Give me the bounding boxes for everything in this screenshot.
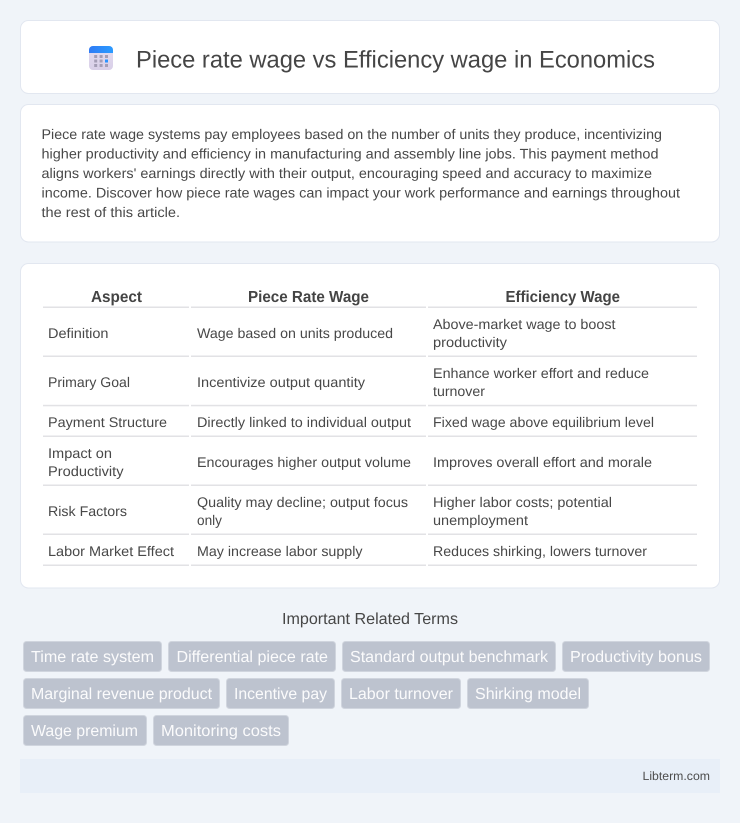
- tag: Wage premium: [31, 723, 138, 740]
- row: labor market effect: [48, 543, 647, 559]
- heading: important related terms: Important Related Terms: [282, 611, 458, 628]
- row: payment structure: Fixed wage above equilibrium level: [433, 414, 654, 430]
- tag: [24, 642, 162, 672]
- tag: Time rate system: [31, 649, 154, 666]
- tag: [468, 678, 588, 708]
- tag: [226, 678, 334, 708]
- tag: Productivity bonus: [570, 649, 702, 666]
- row: payment structure: [48, 414, 654, 430]
- related terms tags: [24, 642, 710, 746]
- intro text: aligns workers' earnings directly with their output, encouraging speed and accuracy to maximize: [42, 165, 652, 181]
- title: Piece rate wage vs Efficiency wage in Economics: [136, 46, 655, 74]
- intro text: the rest of this article.: [42, 204, 180, 220]
- row: definition: [48, 316, 616, 350]
- footer: Libterm.com: [642, 769, 710, 783]
- intro text: higher productivity and efficiency in manufacturing and assembly line jobs. This payment method: [42, 146, 659, 162]
- tag: Differential piece rate: [176, 649, 328, 666]
- table header row: Efficiency Wage: [506, 289, 620, 306]
- tag: [342, 642, 556, 672]
- row: primary goal: Incentivize output quantity: [197, 374, 365, 390]
- footer: [20, 759, 720, 793]
- panel: intro paragraph: [20, 104, 720, 242]
- tag: Labor turnover: [349, 686, 454, 703]
- row: labor market effect: Reduces shirking, lowers turnover: [433, 543, 647, 559]
- tag: Shirking model: [475, 686, 581, 703]
- tag: [168, 642, 336, 672]
- table header row: [91, 289, 620, 306]
- tag: Incentive pay: [234, 686, 327, 703]
- row: risk factors: unemployment: [433, 512, 528, 528]
- row: payment structure: Directly linked to individual output: [197, 414, 411, 430]
- icon: calendar: [89, 46, 113, 70]
- row: risk factors: Higher labor costs; potential: [433, 494, 612, 510]
- row: impact on productivity: [48, 445, 652, 479]
- tag: [562, 642, 710, 672]
- row: primary goal: Primary Goal: [48, 374, 130, 390]
- tag: Standard output benchmark: [350, 649, 549, 666]
- tag: [24, 716, 146, 746]
- row: payment structure: Payment Structure: [48, 414, 167, 430]
- table header row: Aspect: [91, 289, 143, 306]
- row: definition: Wage based on units produced: [197, 325, 393, 341]
- intro text: [42, 126, 680, 220]
- row: primary goal: [48, 365, 649, 399]
- row: impact on productivity: Impact on: [48, 445, 112, 461]
- panel: title header: [20, 20, 720, 94]
- intro text: income. Discover how piece rate wages can impact your work performance and earnings throughout: [42, 184, 680, 200]
- tag: [24, 678, 220, 708]
- tag: [154, 716, 288, 746]
- row: definition: productivity: [433, 334, 507, 350]
- row: labor market effect: May increase labor supply: [197, 543, 362, 559]
- row: definition: Above-market wage to boost: [433, 316, 616, 332]
- intro text: Piece rate wage systems pay employees based on the number of units they produce, incentivizing: [42, 126, 662, 142]
- row: risk factors: Risk Factors: [48, 503, 127, 519]
- row: definition: Definition: [48, 325, 108, 341]
- panel: comparison table: [20, 264, 720, 588]
- row: labor market effect: Labor Market Effect: [48, 543, 174, 559]
- row: risk factors: Quality may decline; output focus: [197, 494, 408, 510]
- row: risk factors: [48, 494, 612, 528]
- row: impact on productivity: Improves overall effort and morale: [433, 454, 652, 470]
- row: primary goal: Enhance worker effort and reduce: [433, 365, 649, 381]
- tag: Marginal revenue product: [31, 686, 213, 703]
- row: risk factors: only: [197, 512, 222, 528]
- row: impact on productivity: Productivity: [48, 463, 124, 479]
- row: primary goal: turnover: [433, 383, 485, 399]
- row: impact on productivity: Encourages higher output volume: [197, 454, 411, 470]
- tag: Monitoring costs: [161, 723, 281, 740]
- tag: [342, 678, 460, 708]
- table header row: Piece Rate Wage: [248, 289, 369, 306]
